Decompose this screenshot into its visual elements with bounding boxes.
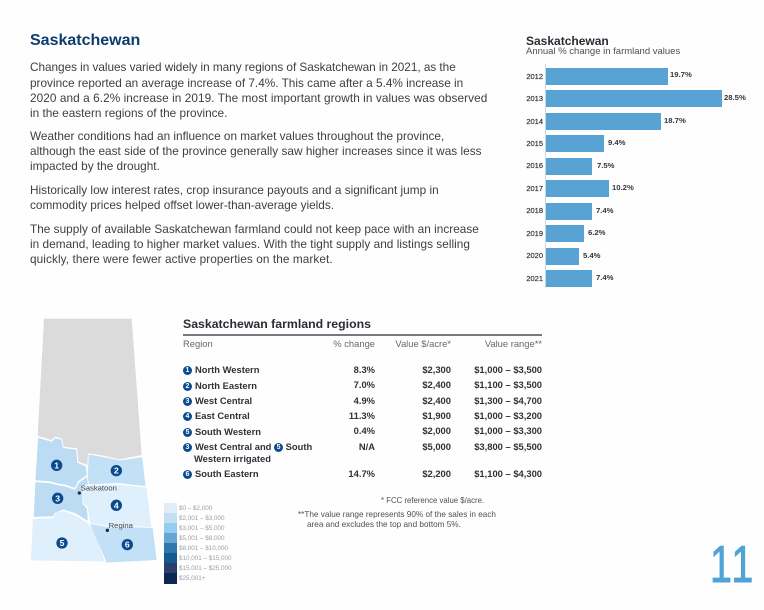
map legend: $15,001 – $25,000 [179,565,232,572]
table rows: $1,100 – $3,500 [474,379,542,390]
region markers [51,460,133,550]
table: Saskatchewan farmland regions [183,317,542,479]
bar chart: annual % change [526,64,746,288]
table rows: N/A [359,441,375,452]
paragraph 1 [30,60,487,120]
footnotes: **The value range represents 90% of the sales in each [298,510,496,519]
table rows: East Central [195,410,250,421]
table rows: 6 [186,471,189,478]
region 6 [90,524,157,563]
map legend [164,503,232,584]
text block: intro paragraphs [30,60,487,266]
region 5 [31,511,105,562]
city: Regina: Regina [109,521,134,530]
bar chart: annual % change: 19.7% [670,70,692,79]
table title: Saskatchewan farmland regions [183,317,371,331]
footnotes [298,496,496,529]
paragraph 2 [30,129,482,173]
table rows: Western irrigated [194,453,271,464]
region markers: 5 [60,538,65,548]
chart heading: Annual % change in farmland values [526,46,680,57]
table rows: 5 [186,429,189,436]
bar chart: annual % change: 5.4% [583,251,601,260]
table rows: 3 [186,444,189,451]
region markers: 1 [54,460,59,470]
bar chart: annual % change: 2021 [526,274,543,283]
table header: % change [333,338,375,349]
map of Saskatchewan regions [31,318,157,563]
map legend: $3,001 – $5,000 [179,525,225,532]
bar chart: annual % change: 2020 [526,251,543,260]
bar chart: annual % change: 6.2% [588,228,606,237]
table rows: 4.9% [354,395,375,406]
city: Saskatoon: Saskatoon [81,484,117,493]
paragraph 2: Weather conditions had an influence on market values throughout the province, [30,129,444,143]
table rows: $2,200 [422,468,451,479]
table rows: South Western [195,426,261,437]
table header: Value range** [485,338,542,349]
table rows: $2,000 [422,425,451,436]
bar chart: annual % change: 2017 [526,184,543,193]
map legend: $25,001+ [179,575,205,582]
paragraph 4 [30,222,479,266]
table rows: $1,000 – $3,500 [474,364,542,375]
table rows: West Central and South [195,441,312,452]
bar chart: annual % change: 2014 [526,117,543,126]
table rows: $1,000 – $3,200 [474,410,542,421]
table rows: $1,300 – $4,700 [474,395,542,406]
region markers: 2 [114,466,119,476]
bar chart: annual % change: 9.4% [608,138,626,147]
map legend: $0 – $2,000 [179,505,212,512]
table rows: $5,000 [422,441,451,452]
footnotes: area and excludes the top and bottom 5%. [307,520,461,529]
table rows: 0.4% [354,425,375,436]
region 4 [83,484,152,527]
map legend: $10,001 – $15,000 [179,555,232,562]
region 1 [35,437,87,488]
table rows: 8.3% [354,364,375,375]
table rows: $2,400 [422,379,451,390]
table rows: 14.7% [348,468,375,479]
paragraph 2: although the east side of the province generally saw higher increases since it was less [30,144,482,158]
paragraph 1: Changes in values varied widely in many regions of Saskatchewan in 2021, as the [30,60,456,74]
paragraph 3 [30,183,439,212]
paragraph 4: quickly, there were fewer active properties on the market. [30,252,333,266]
map legend: $2,001 – $3,000 [179,515,225,522]
region markers: 6 [125,540,130,550]
paragraph 4: The supply of available Saskatchewan farmland could not keep pace with an increase [30,222,479,236]
table rows: 4 [186,413,189,420]
table rows: South Eastern [195,468,259,479]
bar chart: annual % change: 2013 [526,94,543,103]
region 2 [87,454,146,487]
bar chart: annual % change: 18.7% [664,116,686,125]
table rows: 2 [186,383,189,390]
table header: Region [183,338,213,349]
chart heading: Saskatchewan [526,34,609,48]
table rows: $2,400 [422,395,451,406]
table rows: $3,800 – $5,500 [474,441,542,452]
table rows [183,364,542,479]
table rows: 11.3% [349,410,375,421]
bar chart: annual % change: 2018 [526,206,543,215]
map legend: $5,001 – $8,000 [179,535,225,542]
table rows: 5 [277,444,280,451]
paragraph 4: in demand, leading to higher market values. With the tight supply and listings selling [30,237,470,251]
title: Saskatchewan [30,32,140,49]
page number: 11 [710,536,756,594]
table rows: 3 [186,398,189,405]
bar chart: annual % change: 2019 [526,229,543,238]
paragraph 3: commodity prices helped offset lower-than-average yields. [30,198,334,212]
bar chart: annual % change: 10.2% [612,183,634,192]
chart heading [526,34,680,57]
region markers: 4 [114,500,119,510]
table header [183,338,542,349]
region markers: 3 [55,493,60,503]
bar chart: annual % change: 7.5% [597,161,615,170]
table rows: West Central [195,395,252,406]
table header: Value $/acre* [395,338,451,349]
table rows: $1,100 – $4,300 [474,468,542,479]
region 3 [33,476,88,522]
bar chart: annual % change: 2016 [526,161,543,170]
table rows: $1,000 – $3,300 [474,425,542,436]
table rows: North Eastern [195,380,257,391]
bar chart: annual % change: 2015 [526,139,543,148]
map legend: $8,001 – $10,000 [179,545,228,552]
bar chart: annual % change: 2012 [526,72,543,81]
table rows: 1 [186,367,189,374]
bar chart: annual % change: 7.4% [596,273,614,282]
bar chart: annual % change: 7.4% [596,206,614,215]
table rows: 7.0% [354,379,375,390]
paragraph 1: province reported an average increase of 7.4%. This came after a 5.4% increase in [30,76,463,90]
footnotes: * FCC reference value $/acre. [381,496,484,505]
paragraph 1: in the eastern regions of the province. [30,106,227,120]
northern area, gray [38,319,142,465]
paragraph 1: 2020 and a 6.2% increase in 2019. The most important growth in values was observed [30,91,487,105]
bar chart: annual % change: 28.5% [724,93,746,102]
table rows: $1,900 [422,410,451,421]
paragraph 2: impacted by the drought. [30,159,160,173]
table rows: North Western [195,364,259,375]
table rows: $2,300 [422,364,451,375]
paragraph 3: Historically low interest rates, crop insurance payouts and a significant jump in [30,183,439,197]
